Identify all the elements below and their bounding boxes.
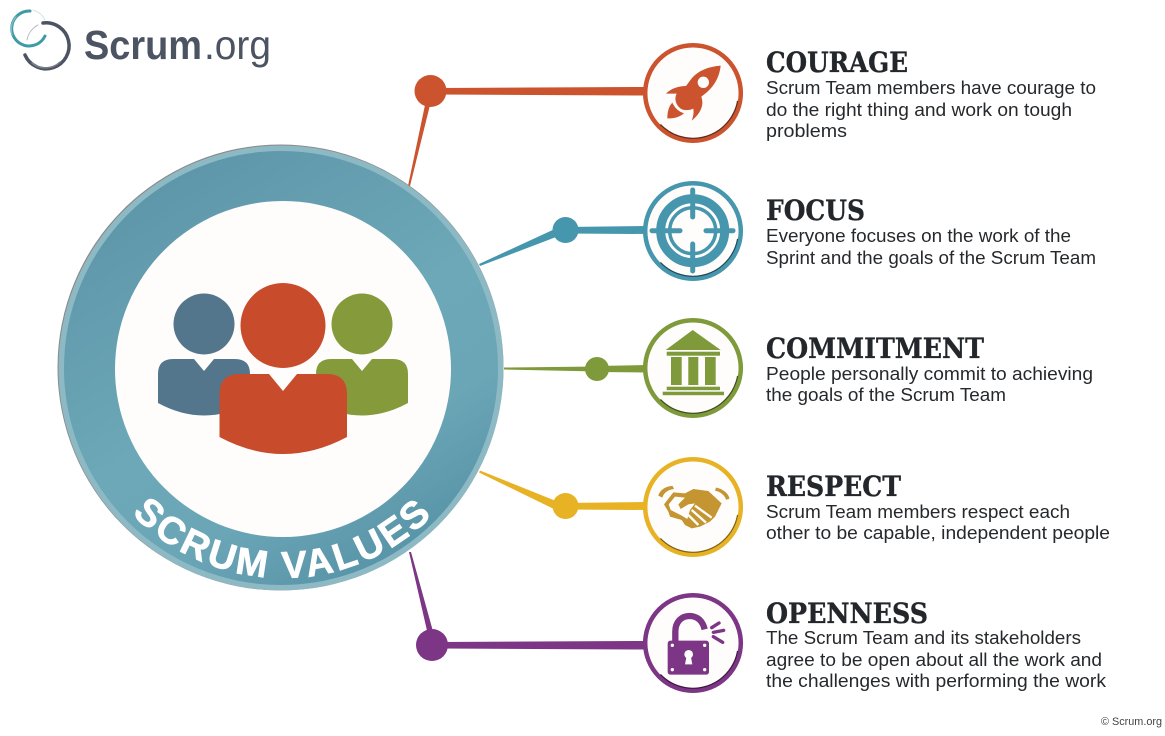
icon: open lock badge: [641, 591, 745, 695]
value text: focus: [766, 194, 1096, 268]
value text: commitment: the goals of the Scrum Team: [766, 385, 1006, 405]
logo wordmark: .org: .org: [204, 22, 271, 68]
badge label: SCRUM VALUES: [135, 498, 428, 578]
icon: rocket badge: [641, 41, 745, 145]
handshake: [658, 486, 729, 528]
open lock: [668, 616, 724, 675]
value text: courage: Scrum Team members have courage to: [766, 78, 1096, 98]
value text: courage: [766, 46, 1096, 141]
value text: respect: [766, 470, 1110, 543]
value text: respect: RESPECT: [766, 470, 901, 503]
logo: Scrum.org: [11, 10, 271, 69]
icon: temple badge: [641, 316, 745, 420]
rocket: [666, 66, 721, 121]
connector: openness: [409, 552, 646, 661]
value text: courage: problems: [766, 121, 847, 141]
value text: courage: COURAGE: [766, 46, 908, 79]
connector: commitment: [504, 357, 646, 381]
target: [652, 190, 733, 271]
value text: openness: agree to be open about all the work and: [766, 650, 1102, 670]
logo wordmark: Scrum: Scrum: [84, 22, 202, 68]
copyright: © Scrum.org: [1101, 716, 1162, 728]
value text: respect: Scrum Team members respect each: [766, 502, 1070, 522]
value text: commitment: People personally commit to achieving: [766, 364, 1093, 384]
value text: commitment: COMMITMENT: [766, 332, 984, 365]
value text: focus: Sprint and the goals of the Scrum Team: [766, 248, 1096, 268]
temple: [663, 330, 724, 395]
connector: focus: [479, 217, 646, 266]
value text: commitment: [766, 332, 1093, 405]
person: red: [220, 283, 347, 454]
value text: respect: other to be capable, independent people: [766, 523, 1110, 543]
value text: openness: the challenges with performing the work: [766, 671, 1107, 691]
icon: logo rings: [11, 10, 69, 69]
icon: three people: [158, 283, 408, 454]
connector: respect: [479, 470, 646, 519]
main badge: scrum values circle: [58, 144, 504, 590]
person: blue: [158, 294, 250, 416]
value text: openness: [766, 597, 1107, 691]
icon: target badge: [641, 179, 745, 283]
connector: courage: [408, 75, 646, 186]
value text: openness: OPENNESS: [766, 597, 928, 630]
value text: focus: Everyone focuses on the work of the: [766, 226, 1071, 246]
icon: handshake badge: [641, 455, 745, 559]
value text: focus: FOCUS: [766, 194, 865, 227]
value text: openness: The Scrum Team and its stakeholders: [766, 628, 1081, 648]
person: green: [316, 294, 408, 416]
value text: courage: do the right thing and work on tough: [766, 100, 1072, 120]
